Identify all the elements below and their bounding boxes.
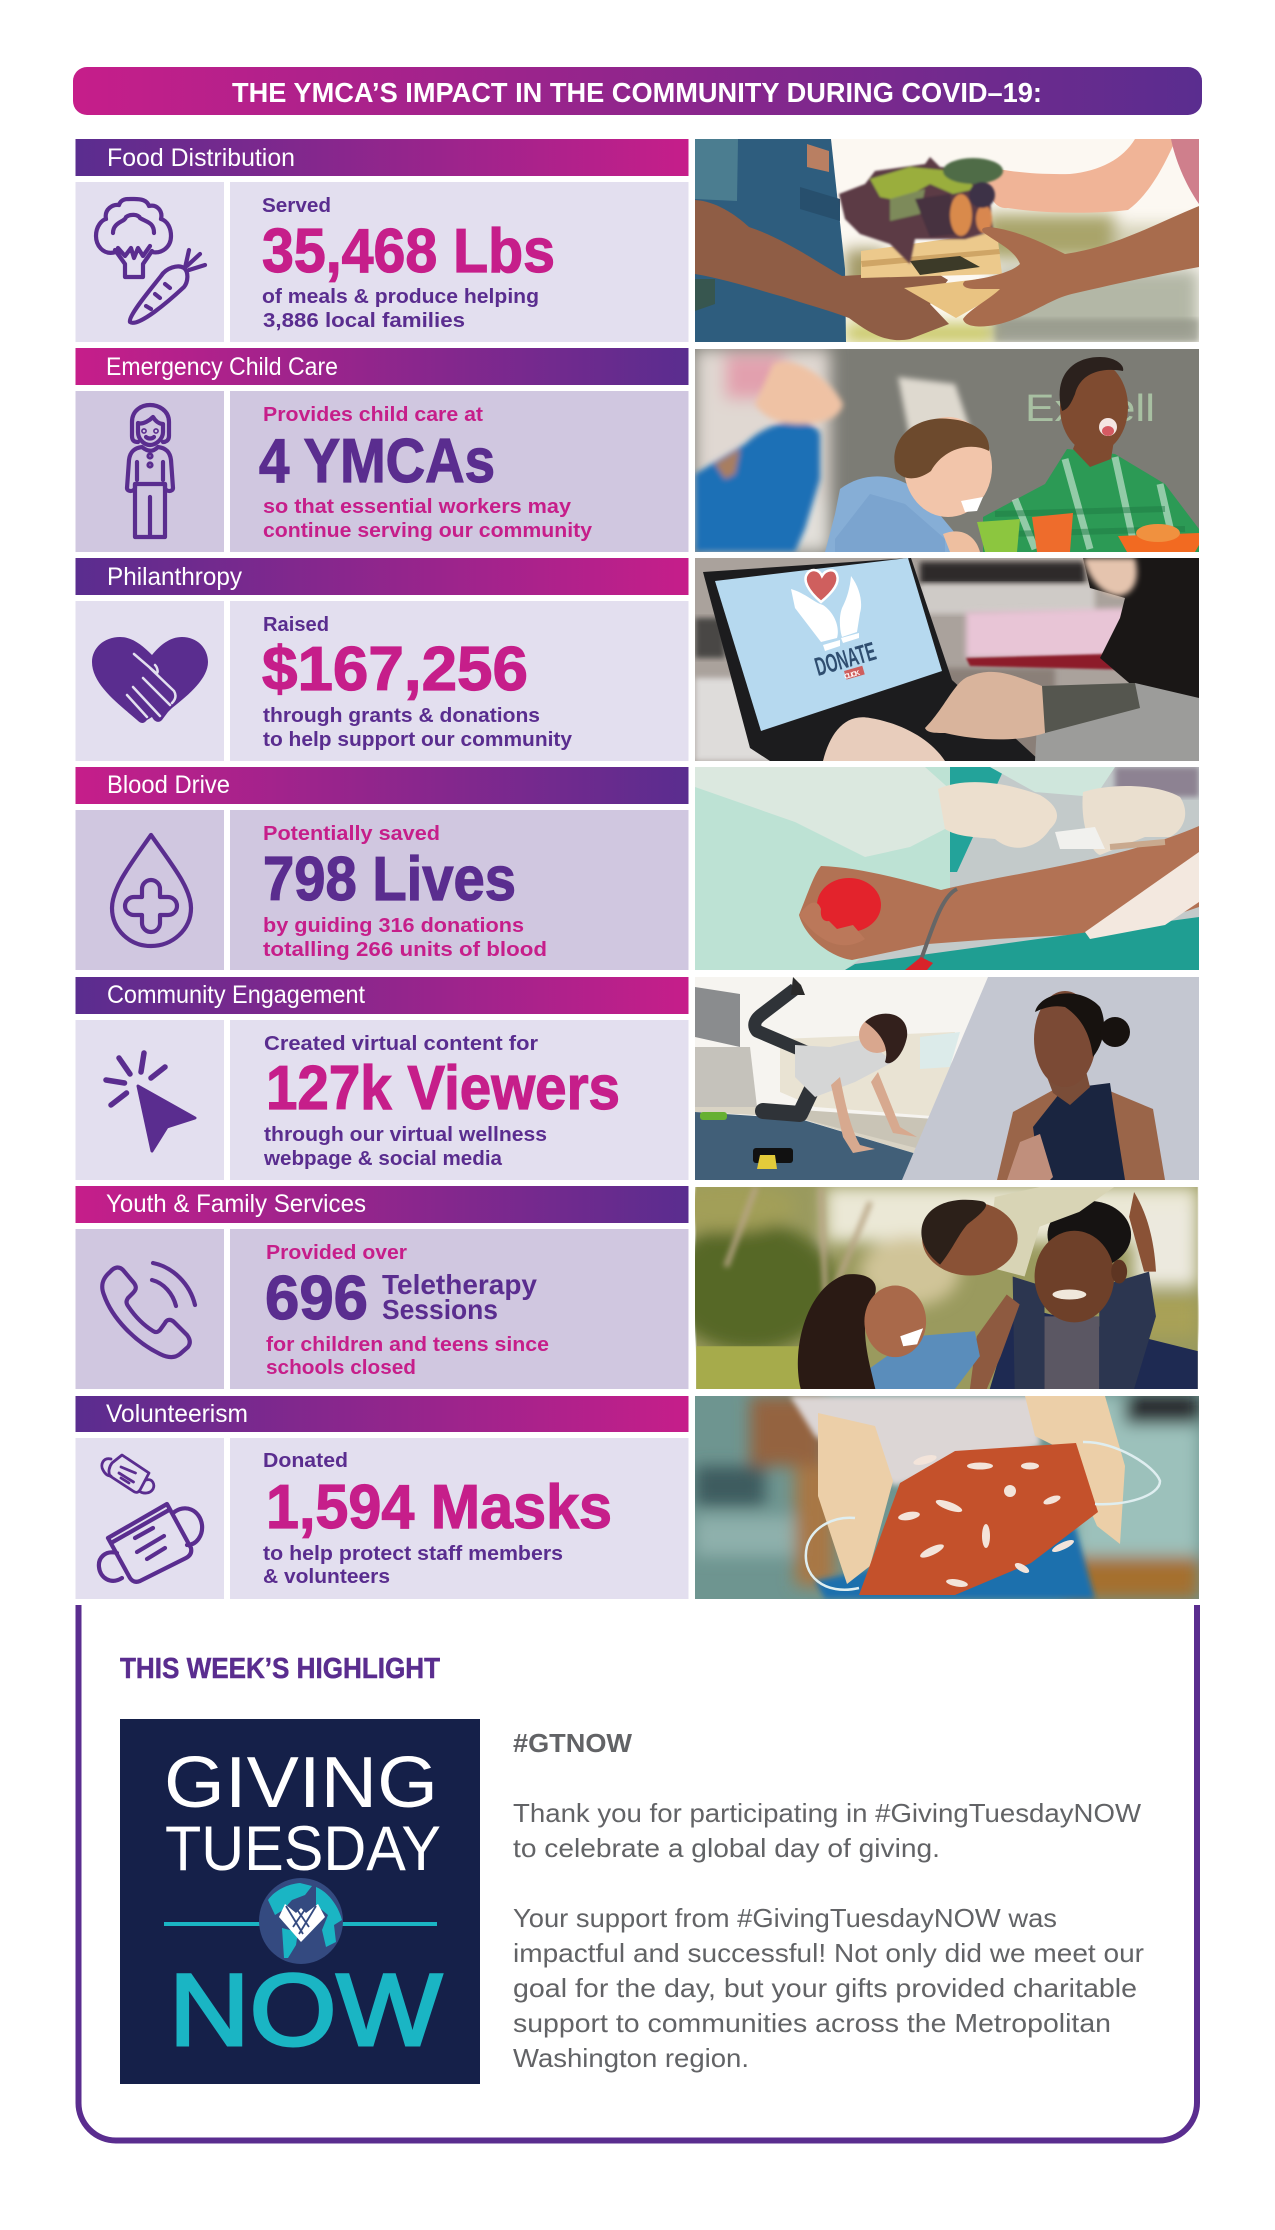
- icon: ringing phone: [102, 1263, 195, 1357]
- panel: youth and family services: [76, 1186, 688, 1389]
- text: blood drive stats: totalling 266 units of blood: [263, 939, 547, 961]
- text: child care stats: 4 YMCAs: [259, 427, 495, 496]
- text: engagement stats: [263, 1033, 620, 1170]
- panel: volunteerism: [76, 1396, 688, 1599]
- text: blood drive stats: 798 Lives: [263, 845, 516, 914]
- text: child care stats: [259, 404, 593, 542]
- icon: face masks: [99, 1455, 202, 1582]
- heart and hands on screen: CLICK: [844, 670, 861, 681]
- text: food stats: [262, 195, 555, 332]
- heading: this week's highlight: THIS WEEK’S HIGHLIGHT: [120, 1653, 440, 1685]
- text: child care stats: Provides child care at: [263, 404, 483, 426]
- text: food stats: 35,468 Lbs: [262, 217, 555, 286]
- panel: volunteerism: Volunteerism: [106, 1400, 248, 1428]
- text: philanthropy stats: [262, 614, 573, 751]
- panel: food distribution: [76, 139, 688, 342]
- text: volunteer stats: & volunteers: [263, 1566, 390, 1588]
- logo: giving tuesday now: TUESDAY: [165, 1814, 441, 1884]
- photo: women exercising at home: [695, 977, 1199, 1180]
- text: food stats: of meals & produce helping: [262, 286, 539, 308]
- panel: food distribution: Food Distribution: [107, 144, 295, 172]
- photo: hands passing a crate of vegetables: [695, 139, 1199, 342]
- photo: blood donation arm with red stress ball: [695, 767, 1199, 970]
- logo: giving tuesday now: [120, 1719, 480, 2084]
- text: child care stats: continue serving our community: [263, 520, 593, 542]
- text: teletherapy stats: 696: [265, 1264, 368, 1333]
- panel: philanthropy: [76, 558, 688, 761]
- text: teletherapy stats: Teletherapy: [382, 1269, 537, 1300]
- text: highlight message: Washington region.: [513, 2043, 749, 2073]
- text: teletherapy stats: Provided over: [266, 1242, 407, 1264]
- text: highlight message: impactful and successful! Not only did we meet our: [513, 1938, 1144, 1968]
- title banner: [73, 67, 1202, 115]
- text: volunteer stats: Donated: [263, 1450, 348, 1472]
- icon: blood drop with cross: [112, 835, 191, 946]
- heart and hands on screen: [791, 570, 879, 682]
- photo: donate page on a laptop: [695, 558, 1199, 761]
- text: teletherapy stats: [265, 1242, 549, 1379]
- panel: blood drive: [76, 767, 688, 970]
- text: philanthropy stats: Raised: [263, 614, 329, 636]
- text: teletherapy stats: for children and teens since: [266, 1334, 549, 1356]
- photo: children in a classroom: [695, 349, 1199, 552]
- text: highlight message: Thank you for participating in #GivingTuesdayNOW: [513, 1798, 1141, 1828]
- panel: emergency child care: [76, 348, 688, 552]
- photo: smiling family outdoors: [695, 1187, 1199, 1389]
- text: volunteer stats: 1,594 Masks: [266, 1473, 612, 1542]
- text: highlight message: support to communities across the Metropolitan: [513, 2008, 1111, 2038]
- text: child care stats: so that essential workers may: [263, 496, 572, 518]
- panel: emergency child care: Emergency Child Care: [106, 353, 338, 381]
- text: engagement stats: Created virtual content for: [264, 1033, 538, 1055]
- text: highlight message: goal for the day, but your gifts provided charitable: [513, 1973, 1137, 2003]
- text: engagement stats: through our virtual wellness: [264, 1124, 547, 1146]
- text: engagement stats: webpage & social media: [263, 1148, 503, 1170]
- text: volunteer stats: to help protect staff members: [263, 1543, 563, 1565]
- icon: heart with clasped hands: [92, 637, 208, 723]
- text: philanthropy stats: to help support our community: [263, 729, 573, 751]
- text: engagement stats: 127k Viewers: [266, 1054, 620, 1123]
- photo: hands holding a cloth mask: [695, 1396, 1199, 1599]
- text: highlight message: #GTNOW: [513, 1728, 632, 1758]
- text: highlight message: Your support from #GivingTuesdayNOW was: [513, 1903, 1057, 1933]
- text: highlight message: [513, 1728, 1144, 2073]
- panel: community engagement: Community Engagement: [107, 981, 365, 1009]
- text: blood drive stats: [263, 823, 547, 961]
- text: food stats: 3,886 local families: [263, 310, 465, 332]
- heart and hands on screen: DONATE: [811, 636, 879, 682]
- panel: blood drive: Blood Drive: [107, 771, 230, 799]
- logo: giving tuesday now: NOW: [169, 1953, 442, 2067]
- text: highlight message: to celebrate a global day of giving.: [513, 1833, 940, 1863]
- icon: clicking cursor: [106, 1053, 195, 1151]
- icon: broccoli and carrot: [96, 199, 205, 323]
- panel: community engagement: [76, 977, 688, 1180]
- photo: children in a classroom: Ex cell: [1025, 388, 1155, 430]
- text: blood drive stats: Potentially saved: [263, 823, 440, 845]
- text: teletherapy stats: Sessions: [382, 1294, 498, 1325]
- panel: youth and family services: Youth & Family Services: [106, 1190, 366, 1218]
- text: philanthropy stats: through grants & donations: [263, 705, 540, 727]
- text: blood drive stats: by guiding 316 donations: [263, 915, 524, 937]
- text: teletherapy stats: schools closed: [266, 1357, 416, 1379]
- panel: this week's highlight: [78, 1605, 1197, 2140]
- text: volunteer stats: [263, 1450, 612, 1588]
- text: philanthropy stats: $167,256: [262, 635, 528, 704]
- title banner: THE YMCA’S IMPACT IN THE COMMUNITY DURING COVID–19:: [232, 77, 1042, 108]
- panel: philanthropy: Philanthropy: [107, 563, 242, 591]
- logo: giving tuesday now: GIVING: [164, 1743, 438, 1823]
- text: food stats: Served: [262, 195, 331, 217]
- icon: child: [127, 405, 173, 537]
